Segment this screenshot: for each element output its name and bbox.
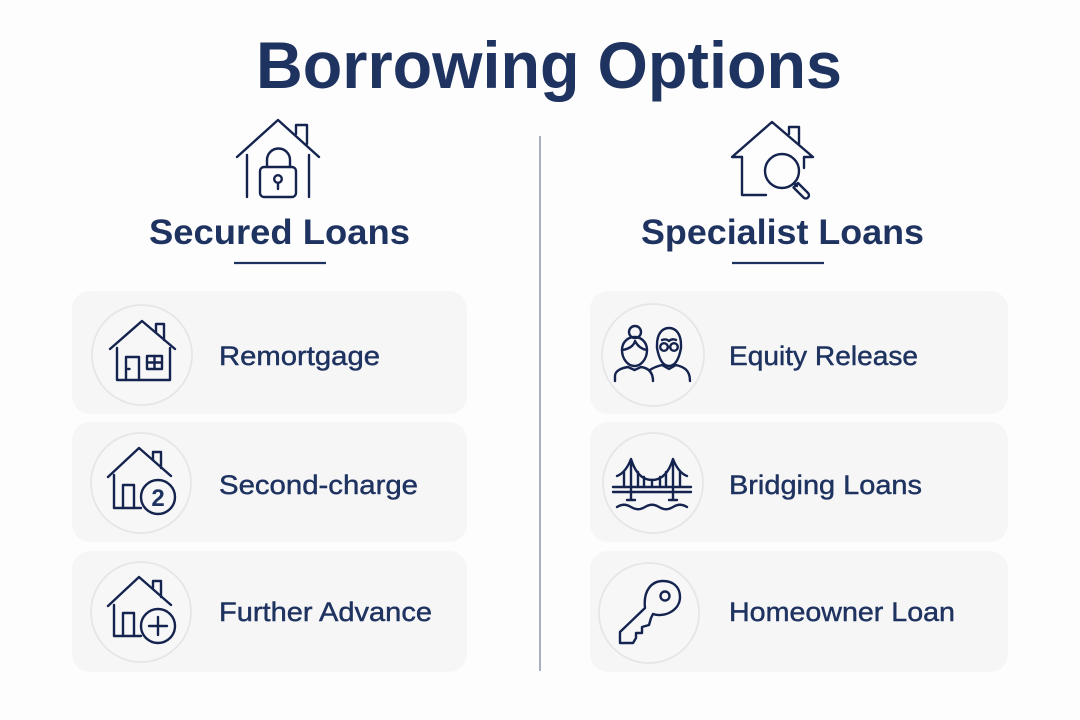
center divider [539,136,541,671]
label: Further Advance [219,597,432,627]
heading: secured loans: Secured Loans [149,213,410,252]
icon: house with plus [108,577,175,643]
label: Bridging Loans [729,470,922,500]
icon: key [620,581,680,643]
icon: house with magnifier [732,122,813,198]
icon: house with padlock [237,120,319,197]
title: Borrowing Options [256,28,842,102]
label: Equity Release [729,341,918,371]
panel: specialist loans [590,122,1008,672]
icon: suspension bridge [613,459,691,509]
card: equity release [590,291,1008,414]
card: remortgage [72,291,467,414]
heading: specialist loans: Specialist Loans [641,213,924,252]
label: Second-charge [219,470,418,500]
card: bridging loans [590,422,1008,542]
panel: secured loans [72,120,467,672]
card: further advance [72,551,467,672]
heading underline [732,262,824,264]
icon: house with number 2 [108,448,175,514]
card: second-charge [72,422,467,542]
label: Homeowner Loan [729,597,955,627]
icon: elderly couple [615,326,690,381]
icon: house with window [110,321,175,380]
icon: house with number 2: 2 [151,485,165,512]
heading underline [234,262,326,264]
label: Remortgage [219,341,380,371]
card: homeowner loan [590,551,1008,672]
